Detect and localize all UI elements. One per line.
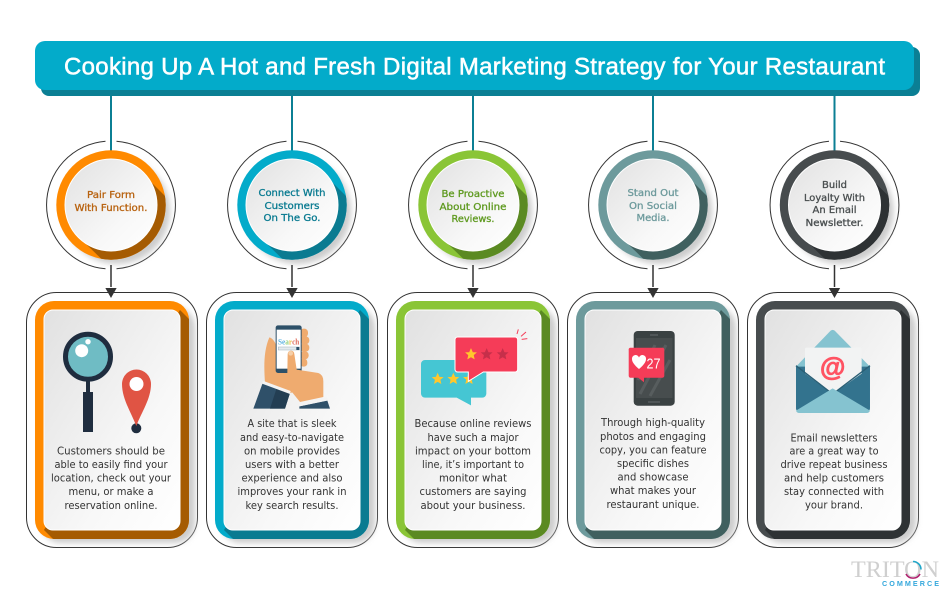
circle label 4: On Social (629, 201, 677, 212)
circle label 2 (258, 188, 326, 224)
card 4 text (600, 416, 707, 511)
circle label 3: Reviews. (452, 214, 494, 225)
logo: Triton Commerce: COMMERCE (882, 579, 939, 588)
card 3 (388, 292, 559, 548)
card 3 text: Because online reviews (414, 417, 532, 430)
column 1: pair form with function (26, 141, 198, 548)
card 2 (206, 292, 378, 548)
circle label 2: On The Go. (264, 213, 320, 224)
card 5 text: stay connected with (784, 485, 884, 498)
circle badge 3 (408, 140, 538, 270)
icon: magnifying glass (66, 334, 110, 432)
circle label 4 (628, 188, 679, 224)
card 2 text: improves your rank in (238, 485, 347, 498)
card 2 text: key search results. (246, 499, 338, 512)
card 4 text: Through high-quality (600, 416, 705, 429)
card 1 (26, 292, 198, 548)
circle label 5: An Email (812, 205, 856, 216)
card 4 text: restaurant unique. (606, 498, 700, 511)
column 3: online reviews (388, 141, 559, 548)
circle label 5: Build (822, 180, 847, 191)
icon: review speech bubbles with stars (421, 329, 527, 405)
arrow 5 (828, 265, 841, 299)
column 4: social media (568, 141, 739, 548)
title banner (35, 41, 920, 96)
circle label 1: With Function. (74, 203, 148, 214)
card 3 text (414, 417, 532, 512)
card 3 text: about your business. (420, 499, 526, 512)
icon: phone with like notification: 27 (646, 356, 660, 372)
card 1 text: able to easily find your (54, 458, 168, 471)
icon: email envelope (796, 330, 870, 413)
icon: hand holding phone with search: Search (278, 338, 300, 347)
card 2 text: experience and also (242, 472, 343, 485)
card 3 text: monitor what (439, 472, 508, 485)
circle label 2: Connect With (258, 188, 326, 199)
card 2 text: users with a better (245, 458, 339, 471)
card 1 text: menu, or make a (68, 485, 154, 498)
card 4 text: specific dishes (617, 457, 689, 470)
logo: Triton Commerce: TRITON (851, 557, 939, 582)
card 5 text (780, 432, 888, 512)
circle label 3: About Online (440, 202, 507, 213)
arrow 1 (104, 265, 118, 299)
card 1 text: Customers should be (57, 444, 165, 458)
card 4 text: copy, you can feature (600, 444, 707, 456)
circle label 4: Stand Out (628, 188, 679, 199)
title banner: Cooking Up A Hot and Fresh Digital Marketing Strategy for Your Restaurant (64, 54, 885, 80)
card 2 text: and easy-to-navigate (240, 431, 344, 444)
card 2 text: on mobile provides (244, 444, 340, 458)
circle label 1: Pair Form (87, 190, 135, 201)
arrow 3 (466, 265, 480, 299)
circle badge 2 (227, 140, 357, 270)
circle label 5: Newsletter. (806, 218, 864, 229)
circle label 5 (804, 180, 865, 229)
arrow 2 (286, 265, 298, 299)
icon: phone with like notification (629, 331, 675, 406)
icon: location pin (122, 370, 151, 433)
card 1 text: location, check out your (51, 472, 171, 485)
card 5 text: and help customers (784, 472, 884, 485)
card 2 text (238, 417, 347, 512)
circle label 2: Customers (264, 201, 320, 212)
card 4 (568, 292, 739, 548)
icon: email envelope: @ (820, 351, 845, 381)
icon: hand holding phone with search (253, 325, 330, 409)
card 3 text: line, it’s important to (422, 458, 524, 471)
arrow 4 (646, 265, 660, 299)
card 5 text: drive repeat business (780, 458, 888, 471)
connector lines (111, 94, 834, 152)
card 5 text: are a great way to (790, 445, 879, 458)
card 5 text: Email newsletters (790, 432, 878, 445)
card 4 text: photos and engaging (600, 430, 706, 443)
card 3 text: impact on your bottom (415, 444, 531, 458)
card 3 text: customers are saying (420, 485, 526, 498)
column 2: connect with customers (206, 141, 378, 548)
circle badge 4 (588, 140, 718, 270)
circle badge 1 (46, 140, 176, 270)
card 5 text: your brand. (805, 499, 863, 512)
card 4 text: and showcase (618, 470, 689, 484)
card 1 text: reservation online. (64, 499, 158, 512)
circle label 4: Media. (636, 213, 670, 224)
column 5: email newsletter (748, 141, 919, 548)
card 4 text: what makes your (610, 484, 696, 497)
card 5 (748, 292, 919, 548)
card 1 text (51, 444, 171, 512)
circle label 5: Loyalty With (804, 193, 865, 204)
card 3 text: have such a major (428, 431, 519, 444)
circle label 1 (74, 190, 148, 214)
card 2 text: A site that is sleek (248, 417, 337, 430)
circle badge 5 (770, 140, 900, 270)
circle label 3: Be Proactive (442, 189, 505, 200)
circle label 3 (440, 189, 507, 225)
